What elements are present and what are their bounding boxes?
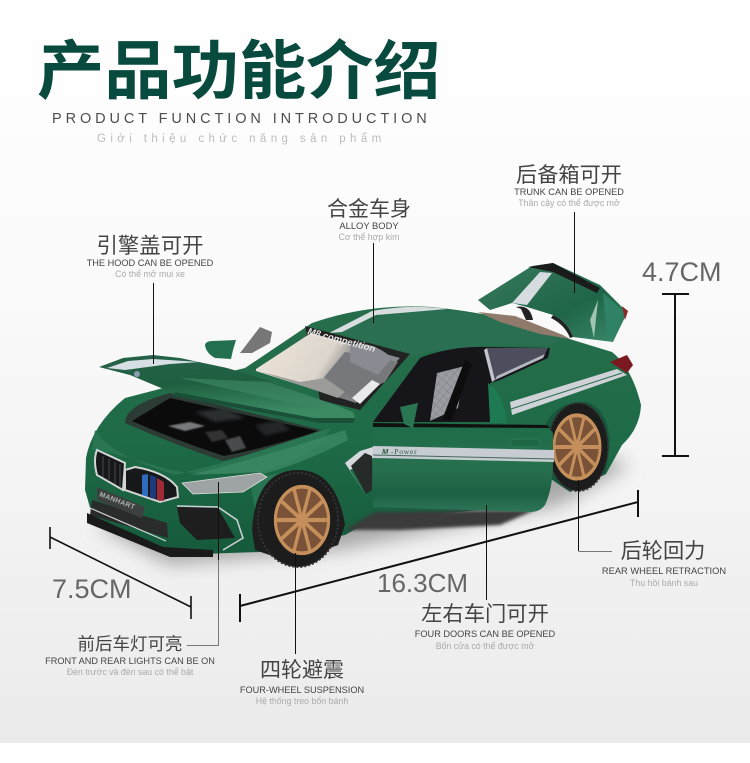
label: rear wheel (602, 539, 726, 588)
label: suspension: FOUR-WHEEL SUSPENSION (240, 685, 364, 695)
dimension: width 7.5CM: 7.5CM (52, 574, 132, 604)
front bumper lip (87, 513, 213, 557)
label: hood: Có thể mở mui xe (115, 269, 185, 279)
roof highlight (340, 308, 560, 358)
label: rear wheel: Thu hồi bánh sau (630, 578, 698, 588)
label: alloy body: Cơ thể hợp kim (339, 232, 399, 242)
label: lights: 前后车灯可亮 (78, 634, 182, 654)
rear wheel (545, 402, 610, 492)
title: 产品功能介绍 (37, 36, 441, 107)
grey leader segments (187, 552, 612, 646)
door inner edge (488, 383, 507, 423)
label: trunk: TRUNK CAN BE OPENED (514, 187, 624, 197)
leader lines (154, 212, 578, 654)
engine bay (125, 393, 322, 461)
door mirror (400, 403, 418, 428)
front fascia highlights (92, 428, 348, 510)
rear fender stripe (510, 369, 627, 415)
label: lights: FRONT AND REAR LIGHTS CAN BE ON (45, 656, 215, 666)
subtitle english: PRODUCT FUNCTION INTRODUCTION (52, 111, 431, 127)
label: rear wheel: 后轮回力 (621, 539, 705, 563)
label: lights: Đèn trước và đèn sau có thể bật (67, 667, 194, 677)
car body (85, 306, 641, 555)
car model (85, 263, 641, 567)
label: suspension (240, 659, 364, 706)
label: doors: 左右车门可开 (421, 602, 549, 626)
label: doors: FOUR DOORS CAN BE OPENED (415, 629, 556, 639)
fender vent (345, 447, 373, 498)
label: hood: THE HOOD CAN BE OPENED (87, 258, 214, 268)
headlight (182, 473, 267, 494)
label: doors: Bốn cửa có thể được mở (436, 641, 535, 651)
dimension: height 4.7CM: 4.7CM (642, 257, 722, 287)
label: alloy body: 合金车身 (327, 198, 411, 221)
label: alloy body: ALLOY BODY (339, 220, 399, 231)
open door (373, 423, 554, 512)
label: hood: 引擎盖可开 (97, 234, 203, 258)
subtitle vietnamese: Giới thiệu chức năng sản phẩm (97, 133, 386, 145)
dimension: width 7.5CM (50, 527, 191, 619)
windshield banner text: M8 competition (306, 326, 377, 355)
hood open (99, 355, 355, 423)
rear deck (478, 312, 570, 339)
windshield (256, 326, 410, 410)
dimension: length 16.3CM (240, 490, 638, 622)
label: lights (45, 634, 215, 677)
left kidney grille (95, 450, 125, 490)
underside shadow below door (345, 510, 535, 530)
right kidney grille (125, 467, 178, 502)
label: trunk: 后备箱可开 (516, 163, 622, 187)
label: suspension: Hệ thống treo bốn bánh (256, 696, 348, 706)
license plate: MANHART (98, 491, 136, 511)
label: trunk (514, 163, 624, 208)
license plate (97, 487, 145, 518)
dimension: height 4.7CM (642, 257, 722, 456)
door stripe (373, 446, 554, 462)
tail light (610, 355, 633, 373)
far side mirror (205, 327, 272, 359)
side window and interior (373, 347, 550, 422)
lower grille (90, 500, 168, 538)
label: doors (415, 602, 556, 651)
dimension: length 16.3CM: 16.3CM (377, 568, 468, 598)
roof stripe (329, 307, 447, 333)
label: trunk: Thân cậy có thể được mở (518, 198, 620, 208)
label: suspension: 四轮避震 (260, 659, 344, 682)
label: hood (87, 234, 214, 279)
label: alloy body (327, 198, 411, 242)
side air intake (177, 506, 243, 550)
trunk lid open (478, 263, 628, 342)
M-Power text: M -Power (382, 447, 417, 456)
car ground shadow (95, 455, 630, 565)
label: rear wheel: REAR WHEEL RETRACTION (602, 566, 726, 576)
door handle (510, 439, 540, 447)
front wheel (252, 470, 345, 567)
